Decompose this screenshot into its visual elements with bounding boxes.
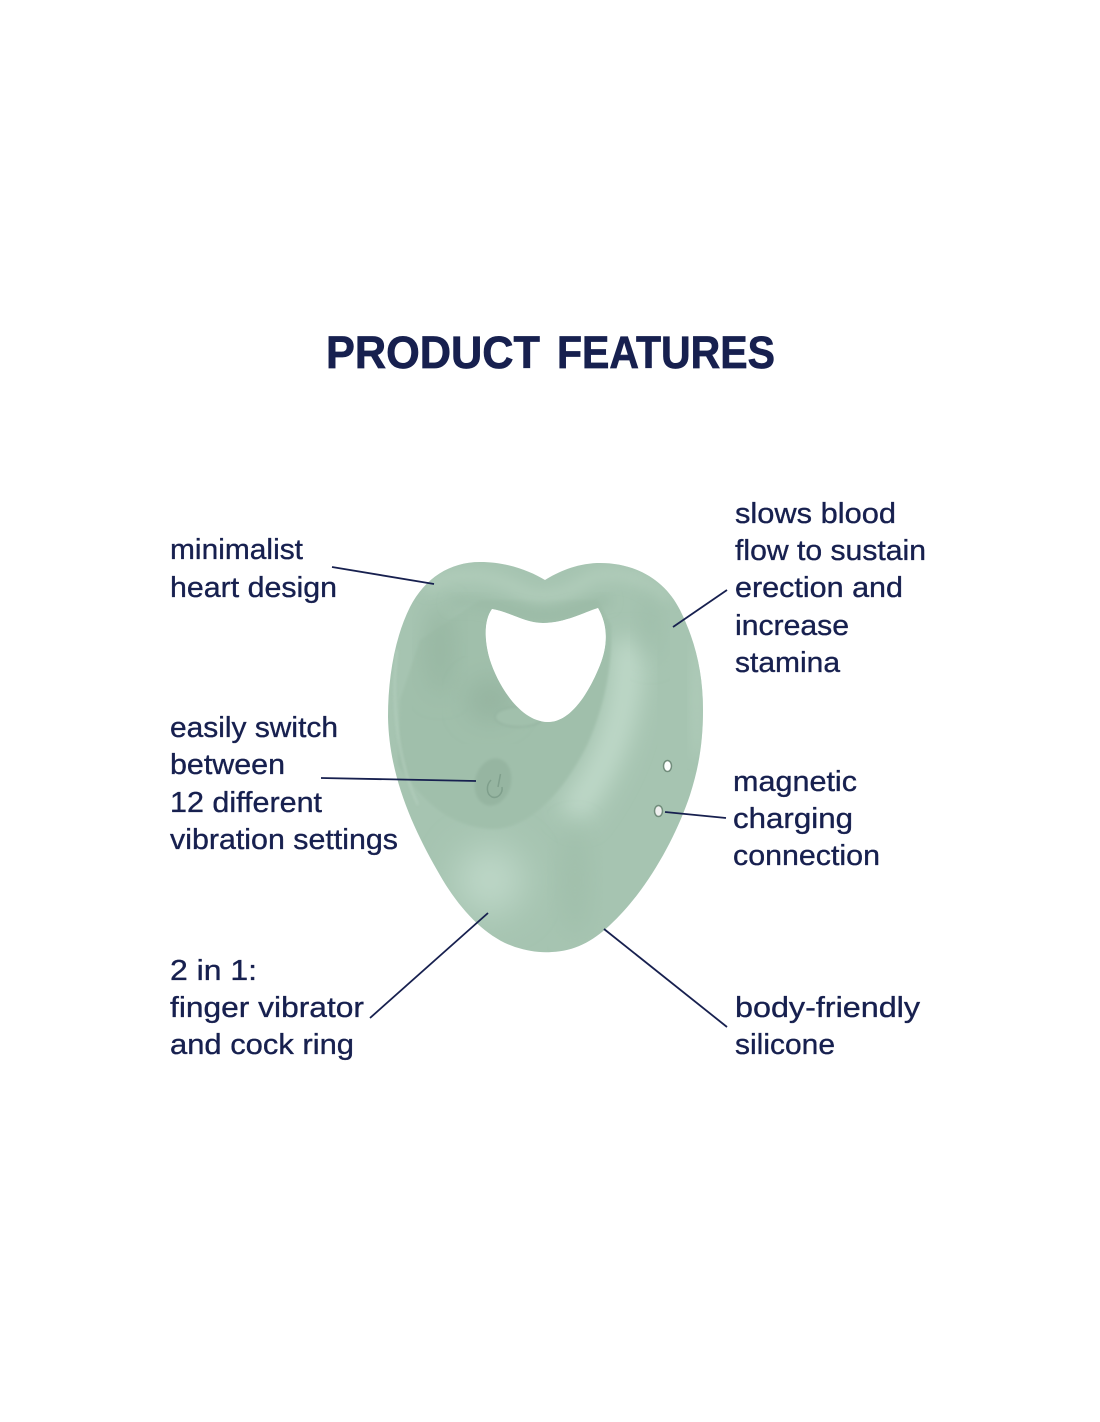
title: PRODUCT: [326, 327, 540, 378]
callout: vibration settings: 12 different: [170, 787, 322, 819]
title: [326, 327, 775, 378]
callout: body-friendly silicone: [604, 929, 921, 1061]
callout: 2 in 1: 2 in 1:: [170, 955, 257, 987]
callout: slows blood flow: slows blood: [735, 498, 896, 530]
callout: vibration settings: between: [170, 749, 285, 781]
left rim highlight: [399, 742, 408, 778]
callout: body-friendly silicone: body-friendly: [735, 992, 921, 1024]
hole edge cut over the indicator: [486, 608, 606, 722]
callout: slows blood flow: increase: [735, 610, 849, 642]
icon: power button: [469, 754, 517, 810]
callout: minimalist heart design: heart design: [170, 572, 337, 604]
lower left highlight: [456, 846, 524, 914]
right rim highlight: [699, 667, 700, 674]
callout: body-friendly silicone: silicone: [735, 1029, 835, 1061]
callout: slows blood flow: stamina: [735, 647, 841, 679]
callout: 2 in 1: and cock ring: [170, 1029, 354, 1061]
callout: magnetic charging: [665, 766, 880, 872]
recess shadow near the hole: [482, 694, 498, 707]
callout: magnetic charging: magnetic: [733, 766, 857, 798]
recess shadow left: [432, 622, 442, 630]
lower ridge shadow under top: [450, 600, 610, 616]
callout: slows blood flow: [673, 498, 926, 679]
callout: 2 in 1: finger vibrator: [170, 992, 364, 1024]
callout: slows blood flow: erection and: [735, 572, 903, 604]
lower shadow band: [561, 825, 589, 935]
product illustration: heart-shaped ring: [380, 555, 710, 960]
inner recess of the ring: [486, 608, 610, 795]
callout: vibration settings: easily switch: [170, 712, 338, 744]
callout: 2 in 1: [170, 913, 488, 1061]
callout: magnetic charging: charging: [733, 803, 853, 835]
oval indicator: [495, 707, 543, 727]
main right highlight: [570, 640, 628, 815]
callout: vibration settings: vibration settings: [170, 824, 398, 856]
callout: magnetic charging: connection: [733, 840, 880, 872]
top ridge highlight: [432, 576, 435, 580]
title: FEATURES: [557, 327, 775, 378]
callout: minimalist heart design: minimalist: [170, 534, 303, 566]
magnetic charging pins: [654, 760, 672, 816]
callout: vibration settings: [170, 712, 476, 856]
right side shadow: [640, 590, 660, 660]
callout: minimalist heart design: [170, 534, 434, 604]
callout: slows blood flow: flow to sustain: [735, 535, 926, 567]
